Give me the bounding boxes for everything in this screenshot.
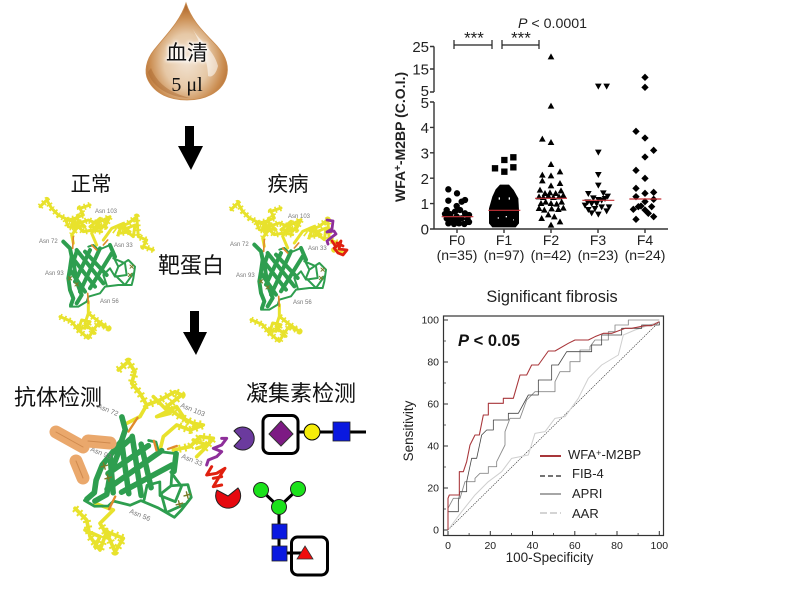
icon: purple lectin	[234, 427, 254, 450]
ROC frame and ticks: 100	[651, 540, 668, 552]
ROC frame and ticks: 60	[427, 398, 439, 410]
serum label: 血清	[166, 42, 208, 65]
category labels: F3	[590, 232, 606, 248]
protein: large bound glycoprotein: Asn 93	[89, 446, 112, 461]
protein: disease glycoprotein: Asn 103	[288, 214, 311, 220]
data points	[442, 53, 661, 228]
protein: normal glycoprotein	[39, 200, 153, 338]
chart: ROC curves for significant fibrosis	[401, 288, 668, 565]
serum volume: 5 μl	[171, 74, 203, 96]
ROC legend: AAR	[572, 506, 599, 521]
protein: disease glycoprotein: Asn 33	[308, 246, 327, 252]
heading: disease: 疾病	[268, 173, 308, 196]
heading: antibody detection: 抗体检测	[14, 385, 102, 410]
ROC frame and ticks: 80	[611, 540, 623, 552]
y axis: 5	[421, 83, 429, 100]
y axis	[412, 39, 668, 238]
ROC legend: WFA	[568, 447, 596, 462]
category labels: (n=23)	[578, 247, 618, 263]
protein: large bound glycoprotein: Asn 103	[179, 402, 206, 419]
y axis title: +	[393, 165, 404, 171]
ROC legend: +	[596, 448, 601, 458]
significance brackets	[454, 28, 539, 49]
serum droplet	[146, 3, 227, 100]
ROC legend: -M2BP	[601, 447, 641, 462]
heading: normal: 正常	[70, 173, 112, 196]
y axis: 5	[421, 95, 429, 112]
y axis: 0	[421, 222, 429, 238]
y axis: 4	[421, 120, 429, 137]
ROC frame and ticks: 20	[427, 482, 439, 494]
category labels	[437, 232, 665, 263]
ROC frame and ticks: 40	[427, 440, 439, 452]
ROC frame and ticks: 100	[421, 314, 439, 326]
label: target protein: 靶蛋白	[158, 253, 224, 278]
ROC frame and ticks: 0	[445, 540, 451, 552]
y axis: 1	[421, 196, 429, 213]
protein: large bound glycoprotein: Asn 56	[128, 508, 151, 523]
y axis: 3	[421, 146, 429, 162]
protein: disease glycoprotein: Asn 72	[230, 242, 249, 248]
serum droplet: 血清	[166, 42, 208, 65]
significance brackets: ***	[464, 28, 484, 48]
protein: normal glycoprotein: Asn 56	[100, 299, 119, 305]
category labels: F2	[543, 232, 559, 248]
protein: disease glycoprotein	[230, 203, 347, 341]
glycan chain: fucose	[254, 482, 328, 575]
protein: normal glycoprotein: Asn 93	[45, 271, 64, 277]
ROC frame and ticks: 0	[433, 524, 439, 536]
protein: normal glycoprotein: Asn 103	[95, 209, 118, 215]
ROC frame and ticks: 20	[484, 540, 496, 552]
category labels: F1	[496, 232, 512, 248]
y axis: 15	[412, 62, 429, 78]
x axis title: 100-Specificity	[506, 550, 594, 565]
chart title: P < 0.0001	[518, 16, 587, 32]
y axis: 2	[421, 171, 429, 188]
ROC legend: FIB-4	[572, 466, 604, 481]
category labels: (n=35)	[437, 247, 477, 263]
arrow: target protein to detection	[183, 311, 207, 355]
ROC legend: APRI	[572, 486, 602, 501]
protein: disease glycoprotein: Asn 93	[236, 273, 255, 279]
y axis title: -M2BP (C.O.I.)	[392, 72, 408, 165]
significance brackets: ***	[511, 28, 531, 48]
category labels: F0	[449, 232, 465, 248]
protein: normal glycoprotein: Asn 33	[114, 243, 133, 249]
ROC frame and ticks	[421, 314, 668, 552]
ROC frame and ticks: 40	[527, 540, 538, 552]
category labels: (n=24)	[625, 247, 665, 263]
y axis title: Sensitivity	[401, 400, 416, 461]
y axis: 25	[412, 39, 429, 56]
protein: disease glycoprotein: Asn 56	[293, 300, 312, 306]
protein: large bound glycoprotein: Asn 33	[180, 453, 203, 468]
icon: red lectin	[216, 488, 241, 508]
ROC legend	[540, 447, 641, 521]
heading: lectin detection: 凝集素检测	[246, 381, 356, 406]
icon: antibody	[56, 432, 110, 478]
category labels: (n=97)	[484, 247, 524, 263]
arrow: serum to target protein	[178, 126, 203, 170]
category labels: (n=42)	[531, 247, 571, 263]
ROC frame and ticks: 80	[427, 356, 439, 368]
y axis title: WFA	[392, 171, 408, 202]
P value annotation: P < 0.05	[458, 332, 520, 350]
glycan chain: sialic acid	[263, 416, 366, 454]
ROC curves	[448, 320, 659, 530]
protein: large bound glycoprotein	[75, 362, 227, 552]
chart: WFA+-M2BP scatter plot	[392, 16, 668, 263]
ROC frame and ticks: 60	[569, 540, 581, 552]
ROC title: Significant fibrosis	[486, 288, 618, 306]
protein: normal glycoprotein: Asn 72	[39, 239, 58, 245]
protein: large bound glycoprotein: Asn 72	[96, 403, 119, 418]
category labels: F4	[637, 232, 653, 248]
